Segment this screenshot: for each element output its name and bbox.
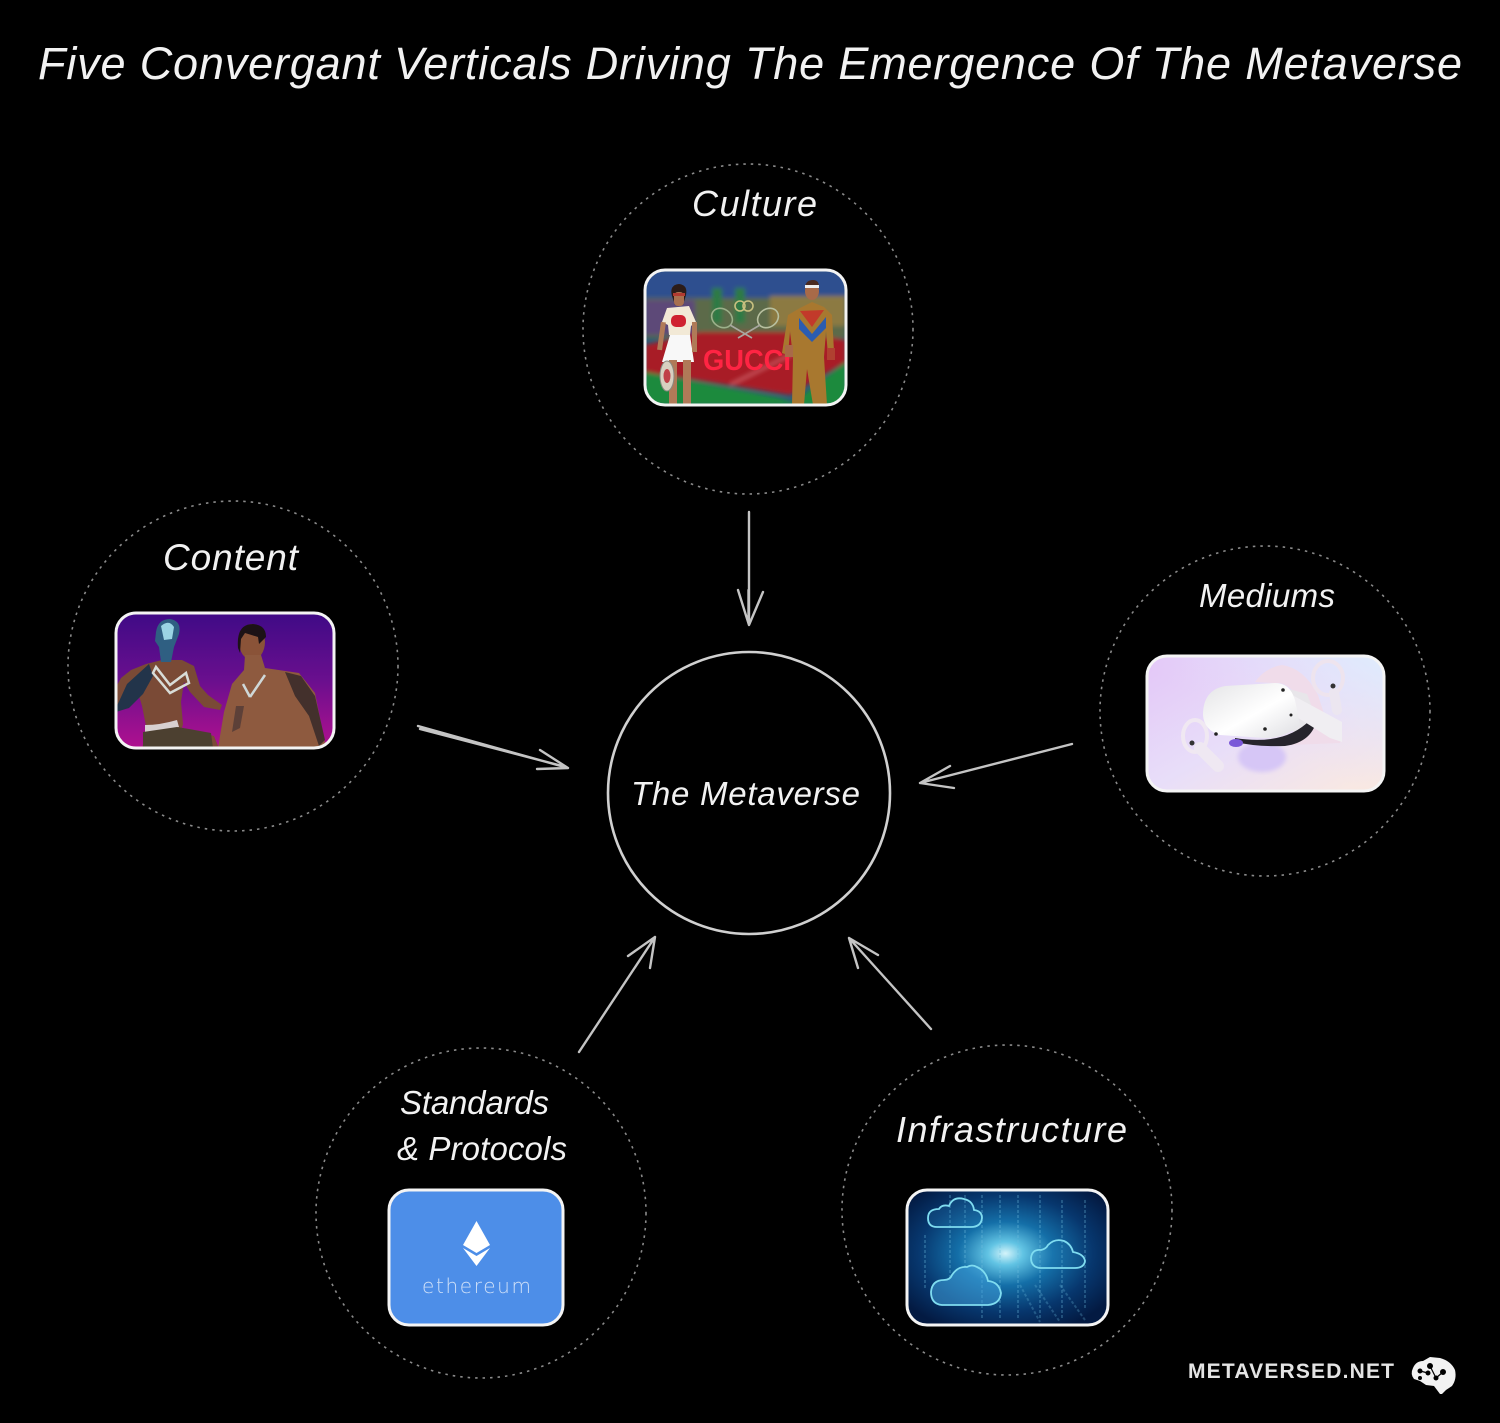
- image frame: [645, 270, 846, 405]
- arrow: mediums to metaverse: [920, 744, 1072, 788]
- image: cloud data: [907, 1190, 1108, 1325]
- ethereum wordmark: ethereum: [422, 1274, 531, 1298]
- heading: standards and protocols: [397, 1084, 567, 1167]
- panel: culture: [583, 164, 913, 494]
- image frame: [1147, 656, 1384, 791]
- image: vr headset: [1147, 656, 1384, 791]
- headset strap: [1255, 665, 1329, 744]
- avatar: woman: [657, 284, 697, 405]
- panel: mediums: [1100, 546, 1430, 876]
- icon: brain logo: [1412, 1357, 1456, 1394]
- headset body: [1290, 690, 1311, 732]
- icon: ethereum diamond: [463, 1221, 490, 1266]
- heading: standards and protocols: & Protocols: [397, 1130, 567, 1167]
- image: gucci tennis avatars: GUCCI: [703, 345, 791, 377]
- heading: standards and protocols: Standards: [400, 1084, 549, 1121]
- left controller: [1183, 720, 1207, 752]
- label: the metaverse: The Metaverse: [631, 775, 860, 812]
- heading: mediums: Mediums: [1199, 577, 1335, 614]
- icon: clouds: [928, 1198, 1085, 1305]
- arrow: culture to metaverse: [738, 512, 763, 625]
- image frame: [907, 1190, 1108, 1325]
- title: Five Convergant Verticals Driving The Emergence Of The Metaverse: [38, 38, 1462, 89]
- avatar: right figure: [218, 624, 326, 748]
- panel: infrastructure: [842, 1045, 1172, 1375]
- image: concert avatars: [108, 613, 334, 750]
- panel: the metaverse: [608, 652, 890, 934]
- avatar: man: [782, 280, 835, 405]
- panel: standards and protocols: [316, 1048, 646, 1378]
- gucci logo: [708, 301, 782, 338]
- brand name: METAVERSED.NET: [1188, 1360, 1394, 1383]
- image frame: [116, 613, 334, 748]
- card: ethereum: [389, 1190, 563, 1325]
- arrow: infrastructure to metaverse: [849, 938, 931, 1029]
- heading: infrastructure: Infrastructure: [896, 1109, 1127, 1150]
- arrow: content to metaverse: [418, 726, 568, 769]
- heading: culture: Culture: [692, 183, 817, 224]
- arrow: standards to metaverse: [579, 937, 655, 1052]
- brand: metaversed.net: [1188, 1357, 1456, 1394]
- panel: content: [68, 501, 398, 831]
- data streams: [925, 1195, 1085, 1322]
- right controller: [1313, 661, 1343, 695]
- image: gucci tennis avatars: [645, 270, 846, 405]
- avatar: left figure: [118, 619, 222, 746]
- heading: content: Content: [163, 537, 300, 578]
